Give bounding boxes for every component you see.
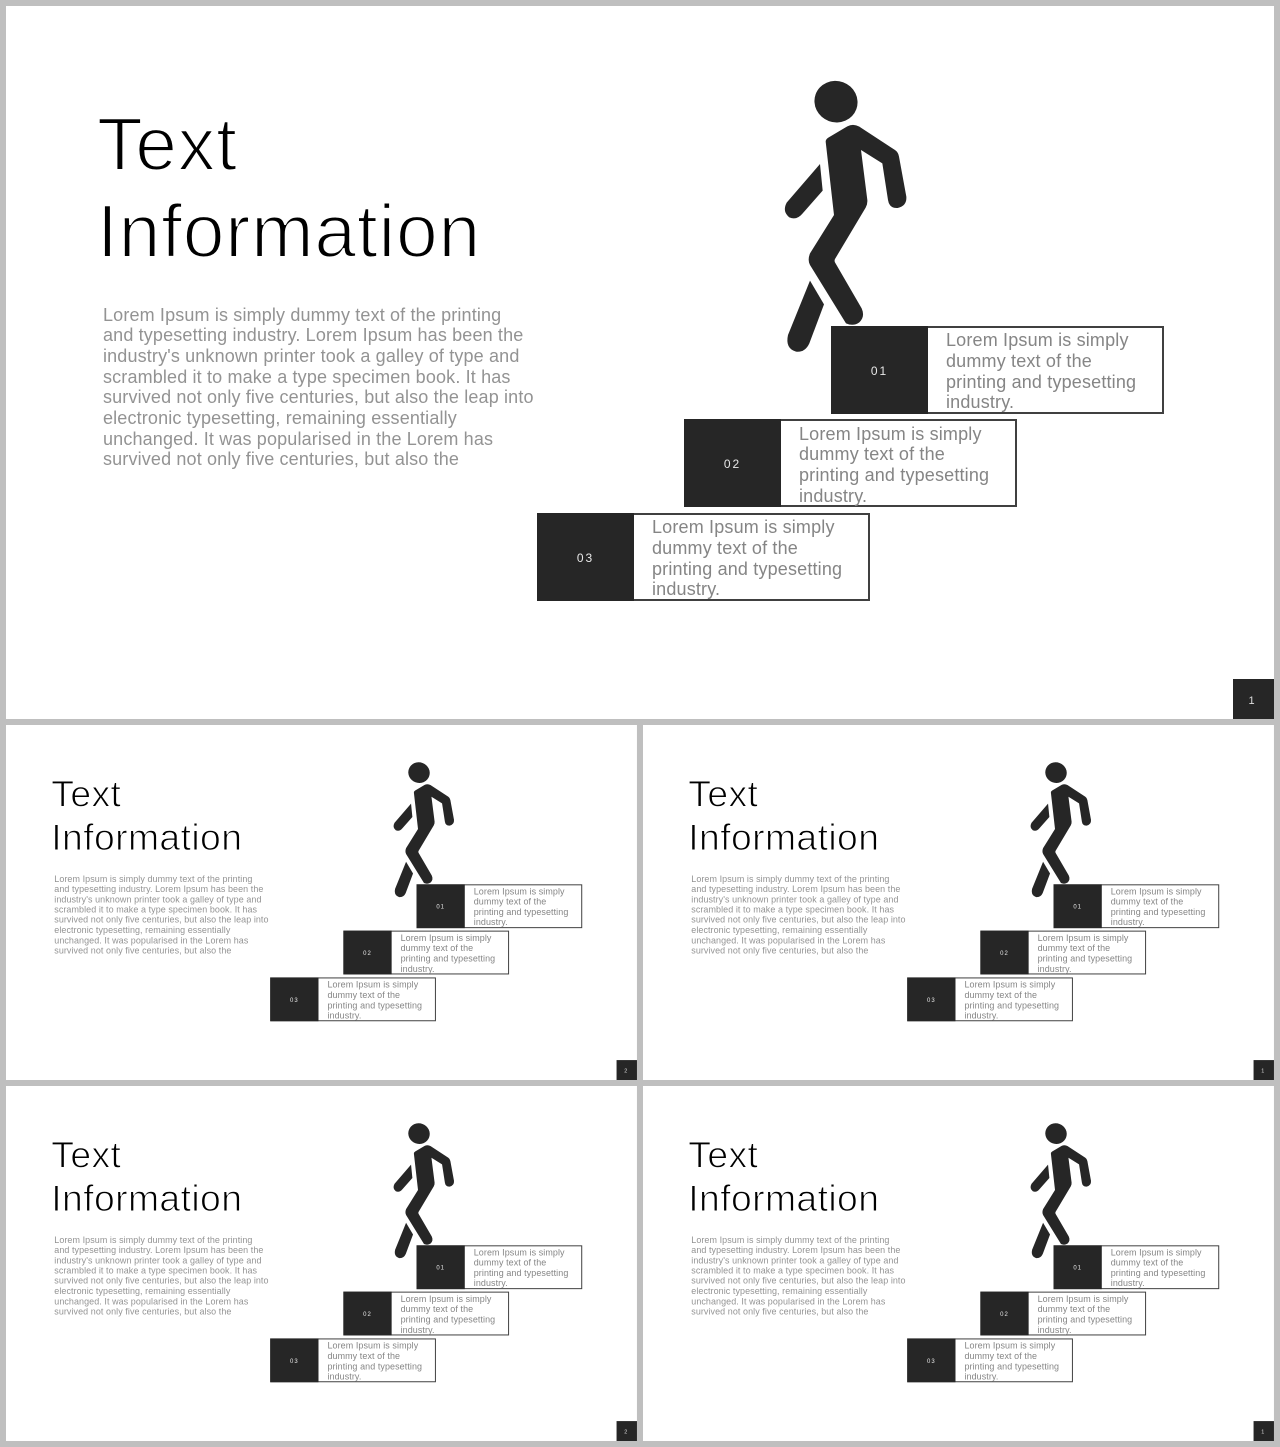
text block: description: Lorem Ipsum is simply dummy text of the printing bbox=[54, 874, 252, 884]
step number 02 bbox=[980, 1292, 1029, 1335]
text block: description: survived not only five centuries, but also the bbox=[691, 946, 868, 956]
step 01 text: Lorem Ipsum is simply bbox=[946, 330, 1129, 350]
text block: description: survived not only five centuries, but also the leap into bbox=[691, 915, 906, 925]
step 03 text: printing and typesetting bbox=[327, 1361, 422, 1371]
text block: description: unchanged. It was popularised in the Lorem has bbox=[691, 1296, 885, 1306]
step number 03: 03 bbox=[577, 551, 594, 565]
step 02 text: dummy text of the bbox=[1038, 1304, 1110, 1314]
text block: description bbox=[691, 1235, 906, 1317]
step 03 bbox=[270, 977, 436, 1021]
text block: description: unchanged. It was popularised in the Lorem has bbox=[103, 429, 493, 449]
text block: description: electronic typesetting, remaining essentially bbox=[54, 1286, 230, 1296]
step 01 text: industry. bbox=[1111, 917, 1145, 927]
step 02 text: printing and typesetting bbox=[1038, 954, 1132, 964]
step 03 text: dummy text of the bbox=[652, 538, 798, 558]
text block: description: survived not only five centuries, but also the bbox=[691, 1307, 868, 1317]
step 02 text bbox=[1038, 1294, 1132, 1335]
step 01 bbox=[417, 1245, 582, 1289]
step 03 text: printing and typesetting bbox=[964, 1361, 1059, 1371]
step 03 text bbox=[327, 1341, 422, 1382]
title: Text bbox=[97, 102, 238, 186]
step 02 text: dummy text of the bbox=[401, 1304, 473, 1314]
title: Text bbox=[688, 1134, 758, 1176]
step 02 text: industry. bbox=[1038, 1325, 1072, 1335]
icon: walking person bbox=[394, 762, 454, 898]
text block: description: survived not only five centuries, but also the bbox=[54, 946, 231, 956]
title: Text bbox=[688, 773, 758, 815]
step 01 text: dummy text of the bbox=[474, 1258, 546, 1268]
step 03 text: Lorem Ipsum is simply bbox=[964, 1341, 1055, 1350]
text block: description bbox=[691, 874, 906, 956]
step 01 text: industry. bbox=[474, 917, 508, 927]
step 03 text: industry. bbox=[327, 1372, 361, 1381]
step 02 bbox=[980, 931, 1146, 974]
title bbox=[688, 773, 879, 858]
step 01 text: dummy text of the bbox=[1111, 897, 1183, 907]
step 03 text bbox=[964, 980, 1059, 1020]
text block: description: and typesetting industry. Lorem Ipsum has been the bbox=[691, 1245, 900, 1255]
step 03 text: industry. bbox=[964, 1372, 998, 1381]
step 03 text bbox=[652, 517, 842, 599]
step 02 text: industry. bbox=[401, 964, 435, 974]
step 03 text: industry. bbox=[652, 579, 720, 599]
step 02 text bbox=[401, 933, 495, 974]
step 03 text: printing and typesetting bbox=[964, 1000, 1059, 1010]
page number: 1 bbox=[1261, 1429, 1264, 1435]
text block: description: unchanged. It was popularised in the Lorem has bbox=[691, 935, 885, 945]
title: Information bbox=[97, 189, 481, 273]
step 02 text: printing and typesetting bbox=[799, 465, 989, 485]
text block: description: unchanged. It was popularised in the Lorem has bbox=[54, 1296, 248, 1306]
step 02 text: dummy text of the bbox=[799, 444, 945, 464]
page number bbox=[617, 1421, 637, 1441]
step 03 text bbox=[964, 1341, 1059, 1382]
step 02 text bbox=[401, 1294, 495, 1335]
icon: walking person bbox=[784, 80, 906, 352]
title bbox=[51, 773, 242, 858]
panel: slide 5 bbox=[643, 1086, 1274, 1441]
step 02 bbox=[343, 1292, 509, 1335]
text block: description bbox=[103, 305, 534, 469]
step 02 text: Lorem Ipsum is simply bbox=[401, 1294, 491, 1304]
text block: description: scrambled it to make a type specimen book. It has bbox=[103, 367, 511, 387]
step 01 text: dummy text of the bbox=[1111, 1258, 1183, 1268]
step 01 bbox=[831, 326, 1164, 414]
text block: description: survived not only five centuries, but also the leap into bbox=[54, 1276, 269, 1286]
step number 01: 01 bbox=[436, 1264, 445, 1271]
step 03 bbox=[270, 1338, 436, 1382]
text block: description: survived not only five centuries, but also the leap into bbox=[103, 387, 534, 407]
title: Text bbox=[51, 773, 121, 815]
step number 02: 02 bbox=[1000, 950, 1009, 957]
step number 01 bbox=[417, 1245, 465, 1289]
step number 02: 02 bbox=[363, 1311, 372, 1318]
step 02 text: Lorem Ipsum is simply bbox=[401, 933, 491, 943]
text block: description: scrambled it to make a type specimen book. It has bbox=[691, 905, 894, 915]
panel: slide 4 bbox=[6, 1086, 637, 1441]
text block: description: Lorem Ipsum is simply dummy text of the printing bbox=[691, 874, 889, 884]
panel: slide 3 bbox=[643, 725, 1274, 1080]
page number bbox=[1254, 1421, 1274, 1441]
step number 02 bbox=[980, 931, 1029, 974]
step number 02 bbox=[343, 931, 392, 974]
step number 02 bbox=[343, 1292, 392, 1335]
step number 03 bbox=[270, 1338, 318, 1382]
text block: description: electronic typesetting, remaining essentially bbox=[54, 925, 230, 935]
step number 01: 01 bbox=[1073, 903, 1082, 910]
text block: description: survived not only five centuries, but also the bbox=[103, 449, 459, 469]
step 01 text bbox=[474, 886, 568, 927]
step 03 text: printing and typesetting bbox=[652, 559, 842, 579]
step number 03 bbox=[537, 513, 634, 600]
text block: description: unchanged. It was popularised in the Lorem has bbox=[54, 935, 248, 945]
step 02 text bbox=[1038, 933, 1132, 974]
step number 02: 02 bbox=[1000, 1311, 1009, 1318]
step 02 text: printing and typesetting bbox=[401, 1315, 495, 1325]
title: Information bbox=[51, 816, 242, 858]
text block: description: industry's unknown printer took a galley of type and bbox=[103, 346, 519, 366]
step number 01 bbox=[831, 326, 928, 414]
text block: description bbox=[54, 874, 269, 956]
text block: description: survived not only five centuries, but also the leap into bbox=[54, 915, 269, 925]
step 03 bbox=[907, 1338, 1073, 1382]
step number 01 bbox=[1054, 884, 1102, 928]
step 01 text: printing and typesetting bbox=[1111, 907, 1205, 917]
step number 01: 01 bbox=[871, 364, 888, 378]
step 03 text: printing and typesetting bbox=[327, 1000, 422, 1010]
step number 01 bbox=[417, 884, 465, 928]
icon: walking person bbox=[1030, 762, 1091, 898]
step 03 text: industry. bbox=[964, 1011, 998, 1020]
page number bbox=[1233, 679, 1274, 719]
page number: 2 bbox=[624, 1429, 627, 1435]
step 01 text: dummy text of the bbox=[946, 351, 1092, 371]
step 03 text: Lorem Ipsum is simply bbox=[652, 517, 835, 537]
icon: walking person bbox=[394, 1123, 454, 1258]
step 01 bbox=[417, 884, 582, 928]
text block: description: and typesetting industry. Lorem Ipsum has been the bbox=[691, 884, 900, 894]
page number bbox=[1254, 1060, 1274, 1080]
title bbox=[51, 1134, 242, 1219]
step number 03 bbox=[907, 1338, 955, 1382]
step 01 text: Lorem Ipsum is simply bbox=[474, 886, 565, 896]
step 02 text: Lorem Ipsum is simply bbox=[1038, 933, 1128, 943]
page number: 1 bbox=[1248, 695, 1255, 707]
step number 01: 01 bbox=[436, 903, 445, 910]
step 01 text: printing and typesetting bbox=[474, 907, 568, 917]
step 01 text: Lorem Ipsum is simply bbox=[474, 1247, 565, 1257]
step 01 text bbox=[1111, 886, 1205, 927]
text block: description: industry's unknown printer took a galley of type and bbox=[54, 1255, 262, 1265]
step number 01: 01 bbox=[1073, 1264, 1082, 1271]
text block: description: scrambled it to make a type specimen book. It has bbox=[54, 1266, 257, 1276]
step 02 text: Lorem Ipsum is simply bbox=[1038, 1294, 1128, 1304]
text block: description: Lorem Ipsum is simply dummy text of the printing bbox=[103, 305, 501, 325]
title bbox=[688, 1134, 879, 1219]
page number: 1 bbox=[1261, 1068, 1264, 1074]
step 03 text: Lorem Ipsum is simply bbox=[327, 980, 418, 989]
step 03 text: dummy text of the bbox=[327, 990, 400, 1000]
step 02 text: industry. bbox=[1038, 964, 1072, 974]
step 02 text: dummy text of the bbox=[401, 943, 473, 953]
text block: description: Lorem Ipsum is simply dummy text of the printing bbox=[691, 1235, 889, 1245]
step 02 bbox=[684, 419, 1017, 507]
step 01 bbox=[1054, 1245, 1219, 1289]
step 03 text: dummy text of the bbox=[964, 990, 1037, 1000]
step 01 text bbox=[474, 1247, 568, 1288]
step 01 text: Lorem Ipsum is simply bbox=[1111, 1247, 1202, 1257]
text block: description: survived not only five centuries, but also the leap into bbox=[691, 1276, 906, 1286]
step 01 bbox=[1054, 884, 1219, 928]
step 03 text: Lorem Ipsum is simply bbox=[327, 1341, 418, 1350]
text block: description: industry's unknown printer took a galley of type and bbox=[691, 894, 899, 904]
text block: description: Lorem Ipsum is simply dummy text of the printing bbox=[54, 1235, 252, 1245]
step 02 text: printing and typesetting bbox=[1038, 1315, 1132, 1325]
step 01 text: industry. bbox=[946, 392, 1014, 412]
step number 03: 03 bbox=[927, 1357, 936, 1364]
step 03 bbox=[907, 977, 1073, 1021]
page number bbox=[617, 1060, 637, 1080]
text block: description: industry's unknown printer took a galley of type and bbox=[691, 1255, 899, 1265]
step number 03: 03 bbox=[290, 996, 299, 1003]
step 03 text: Lorem Ipsum is simply bbox=[964, 980, 1055, 989]
step 03 text: dummy text of the bbox=[327, 1351, 400, 1361]
panel: slide 2 bbox=[6, 725, 637, 1080]
text block: description: and typesetting industry. Lorem Ipsum has been the bbox=[103, 325, 523, 345]
step number 02: 02 bbox=[363, 950, 372, 957]
text block: description: and typesetting industry. Lorem Ipsum has been the bbox=[54, 1245, 263, 1255]
step 01 text: printing and typesetting bbox=[1111, 1268, 1205, 1278]
step 02 text: industry. bbox=[401, 1325, 435, 1335]
step 02 text: Lorem Ipsum is simply bbox=[799, 424, 982, 444]
step 01 text: dummy text of the bbox=[474, 897, 546, 907]
step number 03 bbox=[907, 977, 955, 1021]
step number 03: 03 bbox=[927, 996, 936, 1003]
title bbox=[97, 102, 481, 273]
text block: description: electronic typesetting, remaining essentially bbox=[103, 408, 457, 428]
step number 03 bbox=[270, 977, 318, 1021]
step 01 text: Lorem Ipsum is simply bbox=[1111, 886, 1202, 896]
panel: slide 1 (large) bbox=[6, 6, 1274, 719]
text block: description: and typesetting industry. Lorem Ipsum has been the bbox=[54, 884, 263, 894]
step 01 text: printing and typesetting bbox=[946, 372, 1136, 392]
step 02 bbox=[343, 931, 509, 974]
step 01 text bbox=[946, 330, 1136, 412]
text block: description: scrambled it to make a type specimen book. It has bbox=[54, 905, 257, 915]
step number 02 bbox=[684, 419, 781, 507]
title: Information bbox=[688, 816, 879, 858]
step 03 text bbox=[327, 980, 422, 1020]
step 02 text: printing and typesetting bbox=[401, 954, 495, 964]
step 03 text: dummy text of the bbox=[964, 1351, 1037, 1361]
step 02 text: industry. bbox=[799, 486, 867, 506]
title: Information bbox=[688, 1177, 879, 1219]
step 02 text: dummy text of the bbox=[1038, 943, 1110, 953]
step number 02: 02 bbox=[724, 457, 741, 471]
text block: description: scrambled it to make a type specimen book. It has bbox=[691, 1266, 894, 1276]
text block: description: industry's unknown printer took a galley of type and bbox=[54, 894, 262, 904]
step 01 text: printing and typesetting bbox=[474, 1268, 568, 1278]
step number 01 bbox=[1054, 1245, 1102, 1289]
text block: description: electronic typesetting, remaining essentially bbox=[691, 1286, 867, 1296]
title: Information bbox=[51, 1177, 242, 1219]
icon: walking person bbox=[1030, 1123, 1091, 1258]
step 03 bbox=[537, 513, 870, 600]
step 01 text: industry. bbox=[1111, 1278, 1145, 1288]
title: Text bbox=[51, 1134, 121, 1176]
step 03 text: industry. bbox=[327, 1011, 361, 1020]
step 01 text bbox=[1111, 1247, 1205, 1288]
step 02 bbox=[980, 1292, 1146, 1335]
text block: description: electronic typesetting, remaining essentially bbox=[691, 925, 867, 935]
page number: 2 bbox=[624, 1068, 627, 1074]
step 01 text: industry. bbox=[474, 1278, 508, 1288]
step number 03: 03 bbox=[290, 1357, 299, 1364]
text block: description: survived not only five centuries, but also the bbox=[54, 1307, 231, 1317]
step 02 text bbox=[799, 424, 989, 506]
text block: description bbox=[54, 1235, 269, 1317]
